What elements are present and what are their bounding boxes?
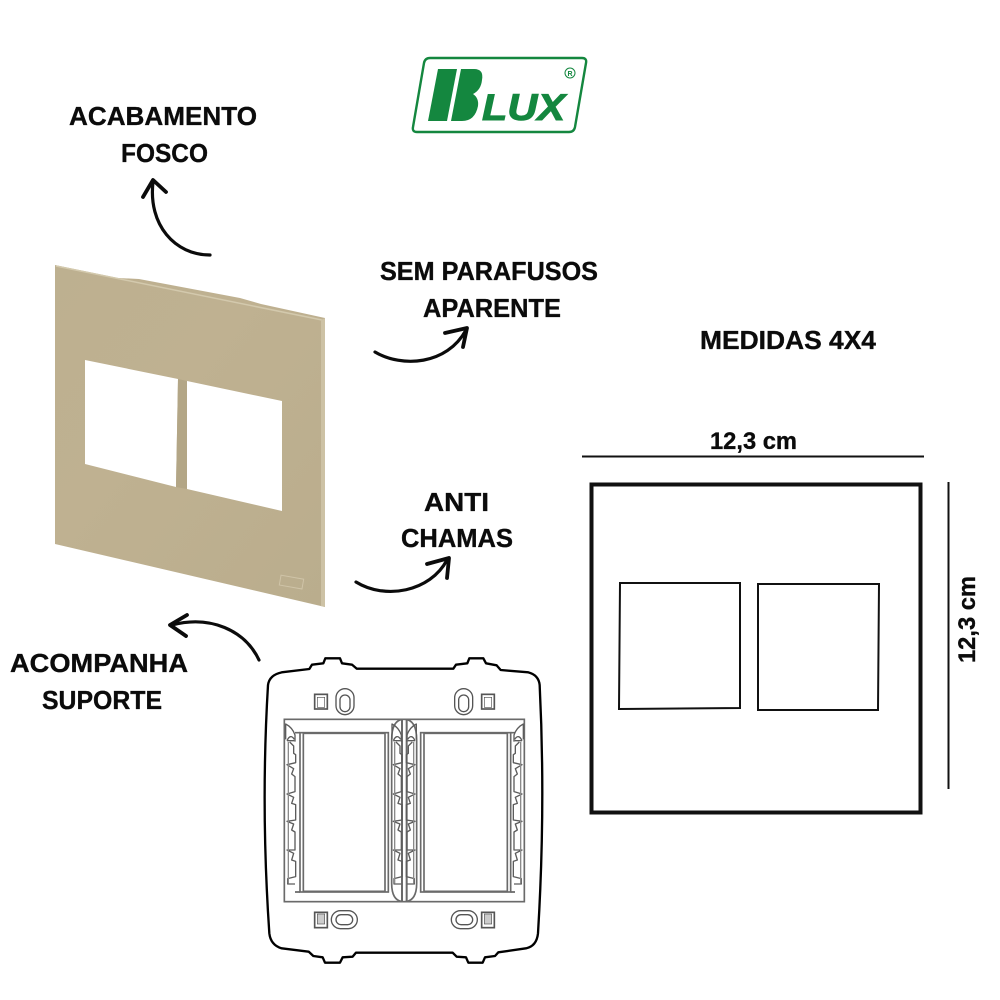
heading: medidas 4x4: MEDIDAS 4X4 — [700, 325, 877, 355]
arrow: to sem parafusos — [375, 328, 467, 361]
diagram: plate dimensions — [592, 484, 920, 812]
heading: sem parafusos aparente: SEM PARAFUSOS — [380, 256, 598, 286]
arrow: to acompanha suporte — [170, 615, 259, 660]
arrow: to anti chamas — [356, 558, 449, 591]
heading: acabamento fosco — [69, 101, 257, 168]
support clips — [286, 724, 523, 884]
dimension: width: 12,3 cm — [710, 428, 797, 455]
support frames — [284, 719, 524, 902]
heading: acompanha suporte — [10, 648, 188, 715]
heading: acabamento fosco: FOSCO — [121, 138, 208, 168]
arrow: to acabamento fosco — [143, 180, 210, 255]
heading: acabamento fosco: ACABAMENTO — [69, 101, 257, 131]
support outline — [265, 658, 542, 963]
heading: sem parafusos aparente — [380, 256, 598, 323]
heading: anti chamas — [401, 487, 513, 553]
support holes — [315, 689, 494, 929]
heading: acompanha suporte: SUPORTE — [42, 685, 162, 715]
dimension: height: 12,3 cm — [954, 576, 981, 663]
product: mounting support — [265, 658, 542, 963]
heading: sem parafusos aparente: APARENTE — [423, 293, 561, 323]
heading: anti chamas: CHAMAS — [401, 523, 513, 553]
heading: acompanha suporte: ACOMPANHA — [10, 648, 188, 678]
heading: anti chamas: ANTI — [424, 487, 489, 517]
product: gold wall plate — [55, 265, 325, 607]
logo: BLUX: LUX — [482, 87, 568, 128]
logo: BLUX: R — [568, 71, 573, 78]
logo: BLUX — [413, 58, 586, 132]
